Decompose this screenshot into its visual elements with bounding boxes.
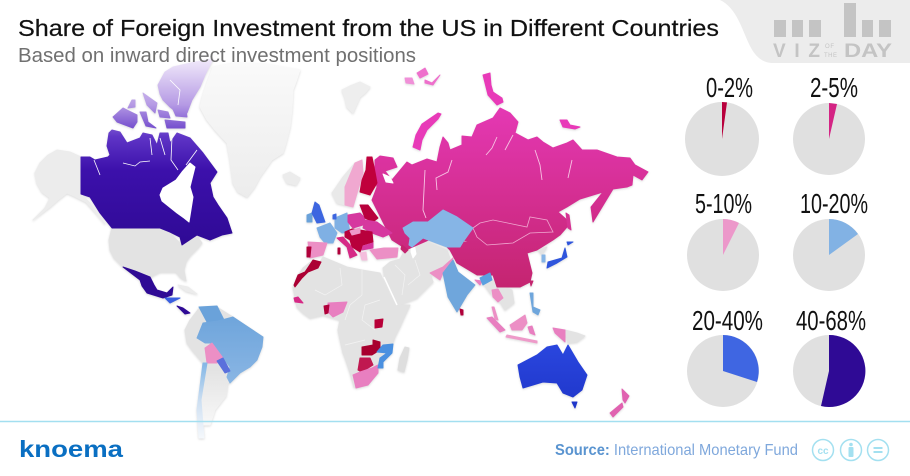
Bolivia bbox=[205, 343, 223, 363]
badge text: THE bbox=[824, 53, 837, 59]
South America base bbox=[185, 307, 263, 425]
Alaska bbox=[33, 150, 105, 224]
New Siberian Islands bbox=[560, 120, 580, 129]
Senegal bbox=[294, 297, 303, 303]
Morocco bbox=[294, 260, 321, 287]
Nigeria bbox=[328, 302, 347, 317]
Arctic islands bbox=[113, 93, 187, 128]
Mongolia border bbox=[473, 217, 553, 245]
pie 20-40%: 20-40% bbox=[692, 305, 763, 336]
Finland bbox=[360, 157, 377, 195]
Papua New Guinea bbox=[565, 330, 585, 343]
Japan bbox=[547, 248, 567, 268]
Sri Lanka bbox=[460, 309, 463, 315]
pie legend bbox=[685, 72, 868, 407]
title: Share of Foreign Investment from the US in Different Countries bbox=[18, 15, 719, 41]
badge text: OF bbox=[825, 44, 834, 50]
Svalbard bbox=[342, 82, 370, 113]
New Guinea west bbox=[553, 328, 565, 342]
Sumatra bbox=[487, 317, 505, 332]
Zambia and Malawi bbox=[362, 340, 380, 355]
grey countries: no data bbox=[33, 63, 585, 425]
Canadian channels bbox=[94, 80, 197, 175]
badge text bbox=[773, 41, 892, 62]
North Korea bbox=[538, 247, 547, 255]
Bangladesh bbox=[480, 273, 492, 285]
Italy bbox=[337, 237, 357, 258]
Turkey bbox=[370, 248, 398, 259]
Central America bbox=[165, 298, 180, 303]
Mozambique bbox=[377, 344, 393, 368]
licence icons bbox=[812, 440, 888, 460]
Caspian Sea bbox=[411, 243, 416, 258]
Central Europe bbox=[345, 229, 373, 252]
African borders bbox=[315, 260, 420, 345]
pie 5-10%: 5-10% bbox=[695, 188, 752, 219]
pie 5-10% bbox=[687, 188, 759, 291]
Nepal bbox=[475, 280, 482, 285]
Taiwan bbox=[530, 281, 533, 286]
pie 2-5%: 2-5% bbox=[810, 72, 858, 103]
pie 10-20%: 10-20% bbox=[800, 188, 868, 219]
Ghana bbox=[324, 305, 329, 314]
pie 20-40% bbox=[687, 305, 763, 407]
New Zealand north bbox=[622, 389, 629, 403]
Red Sea bbox=[384, 277, 397, 305]
Madagascar bbox=[398, 347, 409, 372]
Mexico bbox=[123, 267, 173, 298]
Baltics and Belarus bbox=[360, 205, 378, 222]
badge text: VIZ bbox=[773, 41, 820, 62]
Chile bbox=[197, 363, 207, 438]
Denmark bbox=[333, 214, 336, 219]
Siberian rivers bbox=[423, 135, 572, 218]
Ukraine bbox=[363, 220, 392, 237]
badge bars bbox=[774, 3, 891, 37]
pie 10-20% bbox=[793, 188, 868, 291]
Panama bbox=[177, 306, 190, 314]
Tasmania bbox=[572, 402, 577, 408]
Georgia bbox=[401, 245, 408, 253]
pie 40-68%: 40-68% bbox=[796, 305, 866, 336]
Viz of the Day badge bbox=[720, 0, 910, 63]
Greenland bbox=[200, 63, 300, 197]
pie 0-2% bbox=[685, 72, 759, 176]
Sakhalin bbox=[566, 213, 571, 230]
Pakistan bbox=[430, 258, 453, 280]
Norway bbox=[332, 163, 355, 205]
world map bbox=[33, 59, 648, 438]
Malaysia peninsula bbox=[492, 307, 498, 320]
Canada bbox=[81, 59, 232, 245]
Germany and Benelux bbox=[335, 213, 350, 233]
Ellesmere Island bbox=[158, 59, 213, 113]
Bulgaria bbox=[362, 243, 373, 250]
Middle East and Central Asia bbox=[383, 237, 450, 305]
France bbox=[317, 223, 337, 243]
Slovakia bbox=[350, 228, 360, 235]
United States bbox=[109, 228, 202, 281]
Portugal bbox=[307, 247, 311, 257]
Sweden bbox=[345, 160, 363, 207]
South Africa bbox=[353, 365, 378, 388]
Cuba bbox=[178, 285, 197, 294]
Africa bbox=[293, 257, 410, 387]
New Zealand south bbox=[610, 403, 623, 417]
Botswana bbox=[358, 358, 373, 372]
Greece bbox=[360, 252, 367, 260]
Mainland Southeast Asia bbox=[483, 280, 514, 310]
Kazakhstan bbox=[403, 210, 473, 247]
Java bbox=[506, 335, 537, 343]
icon: no derivatives bbox=[868, 440, 888, 460]
source: Source: International Monetary Fund bbox=[555, 442, 798, 459]
United Kingdom bbox=[312, 202, 325, 223]
Russia and China bbox=[372, 108, 648, 287]
Thailand bbox=[492, 289, 503, 302]
Uganda bbox=[375, 319, 383, 328]
Colombia and Venezuela bbox=[199, 306, 224, 322]
Hokkaido bbox=[567, 242, 573, 245]
Franz Josef Land bbox=[405, 68, 440, 85]
pie 0-2%: 0-2% bbox=[706, 72, 753, 103]
pie 2-5% bbox=[793, 72, 865, 175]
Hudson Bay bbox=[160, 163, 195, 222]
knoema logo: knoema bbox=[19, 436, 123, 462]
pie 40-68% bbox=[793, 305, 866, 407]
Sardinia bbox=[338, 248, 340, 254]
Australia bbox=[518, 345, 587, 397]
Ireland bbox=[307, 213, 312, 222]
White Sea bbox=[383, 174, 393, 183]
badge text: DAY bbox=[844, 41, 892, 62]
Sulawesi bbox=[528, 326, 535, 335]
badge background bbox=[720, 0, 910, 63]
Paraguay bbox=[217, 358, 230, 373]
Novaya Zemlya bbox=[413, 113, 441, 150]
Severnaya Zemlya bbox=[483, 73, 503, 105]
Russian Arctic islands bbox=[405, 68, 580, 150]
South Korea bbox=[542, 255, 545, 262]
subtitle: Based on inward direct investment positions bbox=[18, 45, 416, 67]
Iceland bbox=[283, 172, 300, 185]
icon: attribution bbox=[840, 440, 862, 460]
Philippines bbox=[530, 293, 540, 315]
Spain bbox=[308, 242, 327, 258]
icon: creative commons: cc bbox=[817, 446, 829, 457]
Borneo bbox=[510, 315, 527, 330]
Poland bbox=[348, 213, 365, 228]
India bbox=[443, 260, 475, 312]
Brazil bbox=[197, 317, 263, 383]
Canada mainland bbox=[81, 130, 232, 245]
